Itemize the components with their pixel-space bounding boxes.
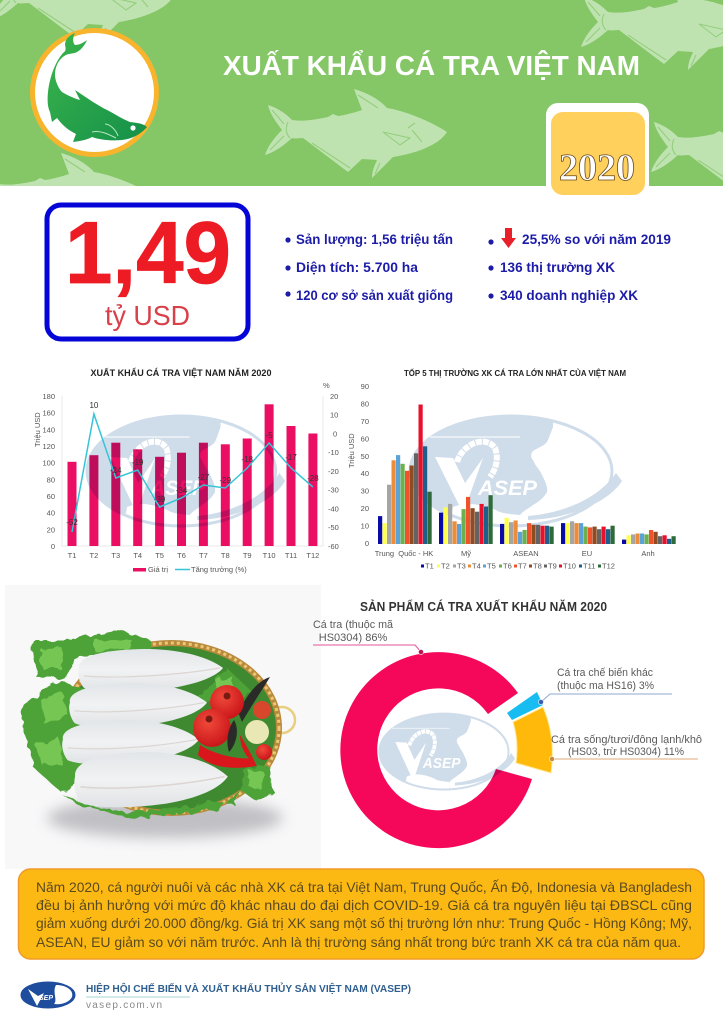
- left axis: 80: [47, 475, 55, 484]
- y axis labels: 70: [361, 417, 369, 426]
- left axis: 160: [42, 409, 55, 418]
- left axis: 20: [47, 525, 55, 534]
- donut label: 11%: (HS03, trừ HS0304) 11%: [568, 746, 684, 758]
- legend: [133, 565, 247, 574]
- market labels: ASEAN: [513, 549, 539, 558]
- footer logo: VASEP: SEP: [39, 995, 53, 1002]
- growth labels: -52: [66, 518, 78, 527]
- key stats right column: 136 thị trường XK: [500, 259, 615, 275]
- month labels: T2: [90, 551, 98, 560]
- growth labels: -28: [307, 474, 319, 483]
- left axis: 180: [42, 392, 55, 401]
- summary callout: ASEAN, EU giảm so với năm trước. Anh là thị trường sáng nhất trong bức tranh XK cá tra của năm qua.: [36, 934, 681, 950]
- key stats right column: 340 doanh nghiệp XK: [500, 287, 638, 303]
- summary callout: [18, 869, 704, 959]
- left axis: 40: [47, 509, 55, 518]
- month labels: T11: [285, 551, 297, 560]
- footer organisation text: vasep.com.vn: [86, 1000, 162, 1011]
- key stats left column: Diện tích: 5.700 ha: [296, 259, 418, 275]
- legend: T8: [533, 562, 542, 570]
- legend: T9: [548, 562, 557, 570]
- market labels: Trung Quốc - HK: [375, 549, 433, 558]
- year badge: 2020: [559, 147, 635, 189]
- bars: Trung Quoc - HK: [378, 404, 432, 544]
- donut chart: products: [340, 652, 552, 848]
- y axis labels: [361, 382, 369, 548]
- line: growth: [72, 414, 313, 532]
- growth labels: -24: [110, 466, 122, 475]
- y axis labels: 90: [361, 382, 369, 391]
- legend: [421, 562, 615, 570]
- footer logo: VASEP: [21, 982, 75, 1008]
- icon: red down arrow: [501, 228, 516, 248]
- chart: monthly export value and growth: [33, 367, 339, 574]
- bars: Anh: [622, 530, 676, 544]
- lettuce: [20, 630, 272, 818]
- legend: T5: [487, 562, 496, 570]
- legend: T6: [503, 562, 512, 570]
- chart: monthly export value and growth: XUẤT KHẨU CÁ TRA VIỆT NAM NĂM 2020: [90, 367, 272, 378]
- right axis: 20: [330, 392, 338, 401]
- bars: My: [439, 495, 493, 544]
- left axis: 0: [51, 542, 55, 551]
- watermark: VASEP: ASEP: [149, 477, 206, 500]
- photo: basket of pangasius fillets: [5, 585, 321, 869]
- month labels: T6: [177, 551, 186, 560]
- chart: top 5 markets: TỐP 5 THỊ TRƯỜNG XK CÁ TRA LỚN NHẤT CỦA VIỆT NAM: [404, 368, 626, 378]
- watermark: VASEP: [379, 713, 516, 792]
- donut label: 11%: Cá tra sống/tươi/đông lạnh/khô: [551, 734, 702, 746]
- right axis: -10: [328, 448, 339, 457]
- title: XUẤT KHẨU CÁ TRA VIỆT NAM: [223, 50, 640, 81]
- legend: T4: [472, 562, 481, 570]
- month labels: [68, 551, 319, 560]
- key stats left column: 120 cơ sở sản xuất giống: [296, 287, 453, 303]
- left axis: 140: [42, 425, 55, 434]
- segment: HS16 3%: [507, 692, 543, 720]
- right axis: 0: [333, 430, 337, 438]
- right axis: -40: [328, 504, 339, 514]
- key figure box: [47, 203, 248, 339]
- growth labels: 10: [89, 401, 99, 410]
- legend: T12: [602, 562, 615, 570]
- bars: EU: [561, 521, 615, 544]
- month labels: T4: [133, 551, 142, 560]
- right axis: -20: [328, 467, 339, 476]
- fillets: [62, 649, 228, 807]
- y axis labels: 80: [361, 400, 369, 408]
- footer organisation text: [86, 982, 411, 1011]
- right axis: -60: [328, 542, 339, 551]
- month labels: T3: [111, 551, 120, 560]
- month labels: T9: [243, 551, 252, 560]
- market labels: [375, 549, 655, 558]
- growth labels: -34: [176, 486, 188, 495]
- donut label: 86%: [313, 619, 424, 655]
- chart: top 5 markets: [347, 368, 676, 570]
- left axis: [42, 392, 55, 551]
- month labels: T12: [306, 551, 319, 560]
- chart: monthly export value and growth: Triệu USD: [33, 412, 42, 447]
- legend: Giá trị: [148, 565, 168, 574]
- segment: HS03 11%: [513, 707, 552, 773]
- watermark: VASEP: [87, 415, 286, 530]
- header band: [0, 0, 723, 186]
- right axis: -30: [328, 486, 339, 495]
- key stats right column: [488, 228, 671, 303]
- donut label: 86%: Cá tra (thuộc mã: [313, 619, 394, 631]
- legend: Tăng trưởng (%): [191, 565, 247, 574]
- growth labels: -17: [285, 453, 297, 462]
- vegetables: [193, 677, 272, 768]
- market labels: Mỹ: [461, 549, 471, 558]
- key stats left column: [285, 231, 453, 303]
- left axis: 100: [42, 459, 55, 468]
- growth labels: -29: [220, 476, 232, 485]
- footer organisation text: HIỆP HỘI CHẾ BIẾN VÀ XUẤT KHẨU THỦY SẢN VIỆT NAM (VASEP): [86, 982, 411, 995]
- y axis labels: 30: [361, 487, 369, 496]
- watermark: VASEP: ASEP: [422, 755, 461, 771]
- segment: HS0304 86%: [340, 652, 532, 848]
- donut label: 3%: [538, 667, 672, 705]
- legend: T1: [425, 562, 434, 570]
- legend: T2: [441, 562, 450, 570]
- legend: T10: [563, 562, 576, 570]
- growth labels: -19: [132, 458, 144, 467]
- growth labels: -18: [241, 455, 254, 464]
- key stats right column: 25,5% so với năm 2019: [522, 231, 671, 247]
- logo: fish in circle: [32, 30, 156, 154]
- donut title: SẢN PHẨM CÁ TRA XUẤT KHẨU NĂM 2020: [360, 599, 607, 614]
- y axis labels: 20: [361, 504, 369, 513]
- month labels: T5: [155, 551, 164, 560]
- legend: T11: [583, 562, 595, 570]
- summary callout: Năm 2020, cá người nuôi và các nhà XK cá tra tại Việt Nam, Trung Quốc, Ấn Độ, Indonesia và Bangladesh: [36, 879, 692, 895]
- donut label: 11%: [549, 734, 702, 762]
- bars: ASEAN: [500, 518, 554, 544]
- key stats left column: Sản lượng: 1,56 triệu tấn: [296, 231, 453, 247]
- left axis: 120: [42, 442, 55, 451]
- watermark: VASEP: ASEP: [477, 477, 538, 500]
- summary callout: giảm xuống dưới 20.000 đồng/kg. Giá trị XK sang một số thị trường lớn như: Trung Quốc - Hồng Kông; Mỹ,: [36, 915, 692, 931]
- right axis: %: [323, 381, 330, 390]
- summary callout: đều bị ảnh hưởng với mức độ khác nhau do đại dịch COVID-19. Giá cá tra nguyên liệu tại ĐBSCL cũng: [36, 897, 692, 913]
- growth labels: [66, 401, 319, 527]
- key figure box: tỷ USD: [105, 300, 190, 331]
- left axis: 60: [47, 492, 55, 501]
- y axis labels: 40: [361, 469, 369, 478]
- donut label: 3%: (thuộc ma HS16) 3%: [557, 680, 654, 692]
- market labels: EU: [582, 549, 592, 558]
- right axis: 10: [330, 411, 338, 420]
- growth labels: -5: [266, 431, 273, 440]
- month labels: T1: [68, 551, 76, 560]
- bars: value: [68, 404, 317, 546]
- y axis labels: 0: [365, 539, 369, 548]
- key figure box: 1,49: [65, 203, 231, 302]
- donut label: 86%: HS0304) 86%: [319, 632, 387, 644]
- legend: T3: [457, 562, 466, 570]
- legend: T7: [518, 562, 527, 570]
- y axis labels: 60: [361, 434, 369, 443]
- month labels: T7: [199, 551, 208, 560]
- right axis: [323, 381, 339, 551]
- right axis: -50: [328, 523, 339, 532]
- growth labels: -39: [154, 495, 166, 504]
- month labels: T10: [263, 551, 276, 560]
- watermark: VASEP: [410, 415, 623, 530]
- growth labels: -27: [198, 473, 210, 482]
- y axis labels: 10: [361, 522, 369, 530]
- year badge: [546, 103, 649, 198]
- month labels: T8: [221, 551, 230, 560]
- decorative fish shoal: [0, 0, 723, 242]
- donut label: 3%: Cá tra chế biến khác: [557, 667, 653, 679]
- chart: top 5 markets: Triệu USD: [347, 433, 356, 468]
- market labels: Anh: [641, 549, 655, 558]
- y axis labels: 50: [361, 452, 369, 461]
